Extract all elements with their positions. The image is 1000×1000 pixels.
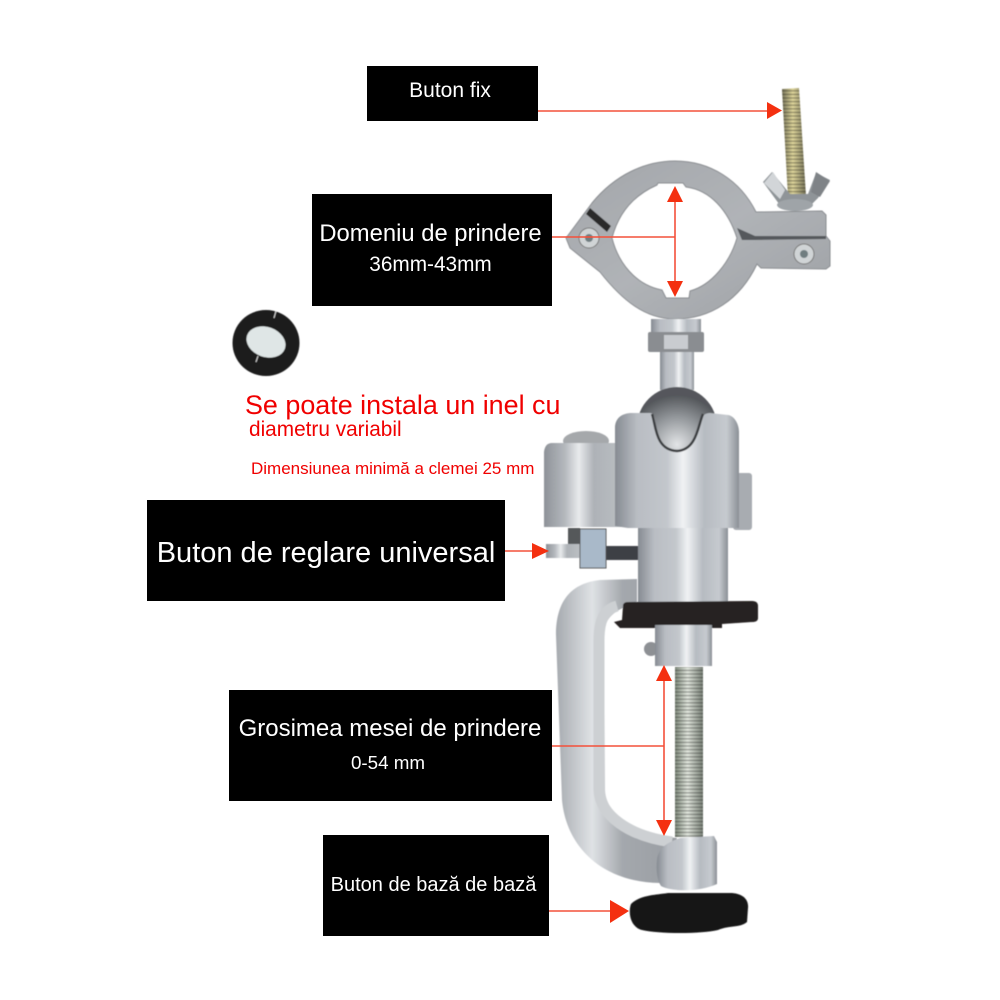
threaded screw	[675, 667, 703, 837]
arrow: fixed knob	[538, 102, 782, 119]
note: variable diameter ring: Se poate instala un inel cu	[245, 390, 560, 420]
label box: base knob	[323, 835, 549, 936]
note: variable diameter ring	[245, 390, 560, 478]
swivel neck	[648, 319, 704, 390]
note: variable diameter ring: Dimensiunea minimă a clemei 25 mm	[251, 459, 534, 478]
column	[638, 528, 728, 603]
tube clamp ring	[566, 161, 830, 319]
arrow: table thickness dimension	[552, 665, 672, 836]
black washer	[614, 601, 758, 628]
label box: Buton fix	[367, 66, 538, 121]
device: bench clamp stand	[544, 88, 830, 933]
bolt with wing nut	[763, 88, 830, 211]
clamp joint detail	[579, 208, 826, 264]
label box: universal adjustment knob	[147, 500, 505, 601]
label box: universal adjustment knob: Buton de reglare universal	[157, 537, 495, 569]
arrow: base knob	[549, 900, 629, 923]
label box: Buton fix: Buton fix	[409, 79, 491, 102]
label box: base knob: Buton de bază de bază	[331, 874, 537, 896]
label box: table thickness	[229, 690, 552, 801]
arrow: universal knob	[505, 543, 549, 559]
arrow: clamping range dimension	[552, 186, 683, 297]
side block and rod	[544, 431, 638, 568]
label box: clamping range	[312, 194, 552, 306]
C-frame	[556, 579, 677, 883]
C-frame inner strip	[599, 606, 672, 842]
label box: table thickness: Grosimea mesei de prindere	[239, 715, 541, 742]
black adjustment knob	[630, 893, 748, 933]
screw collar	[644, 625, 712, 666]
icon: black reducer ring	[232, 310, 300, 376]
label box: table thickness: 0-54 mm	[351, 752, 425, 773]
label box: clamping range: 36mm-43mm	[369, 253, 492, 276]
label box: clamping range: Domeniu de prindere	[319, 220, 542, 247]
ball joint	[637, 387, 717, 467]
base foot	[657, 836, 717, 890]
note: variable diameter ring: diametru variabil	[249, 418, 402, 441]
main body	[615, 413, 752, 530]
